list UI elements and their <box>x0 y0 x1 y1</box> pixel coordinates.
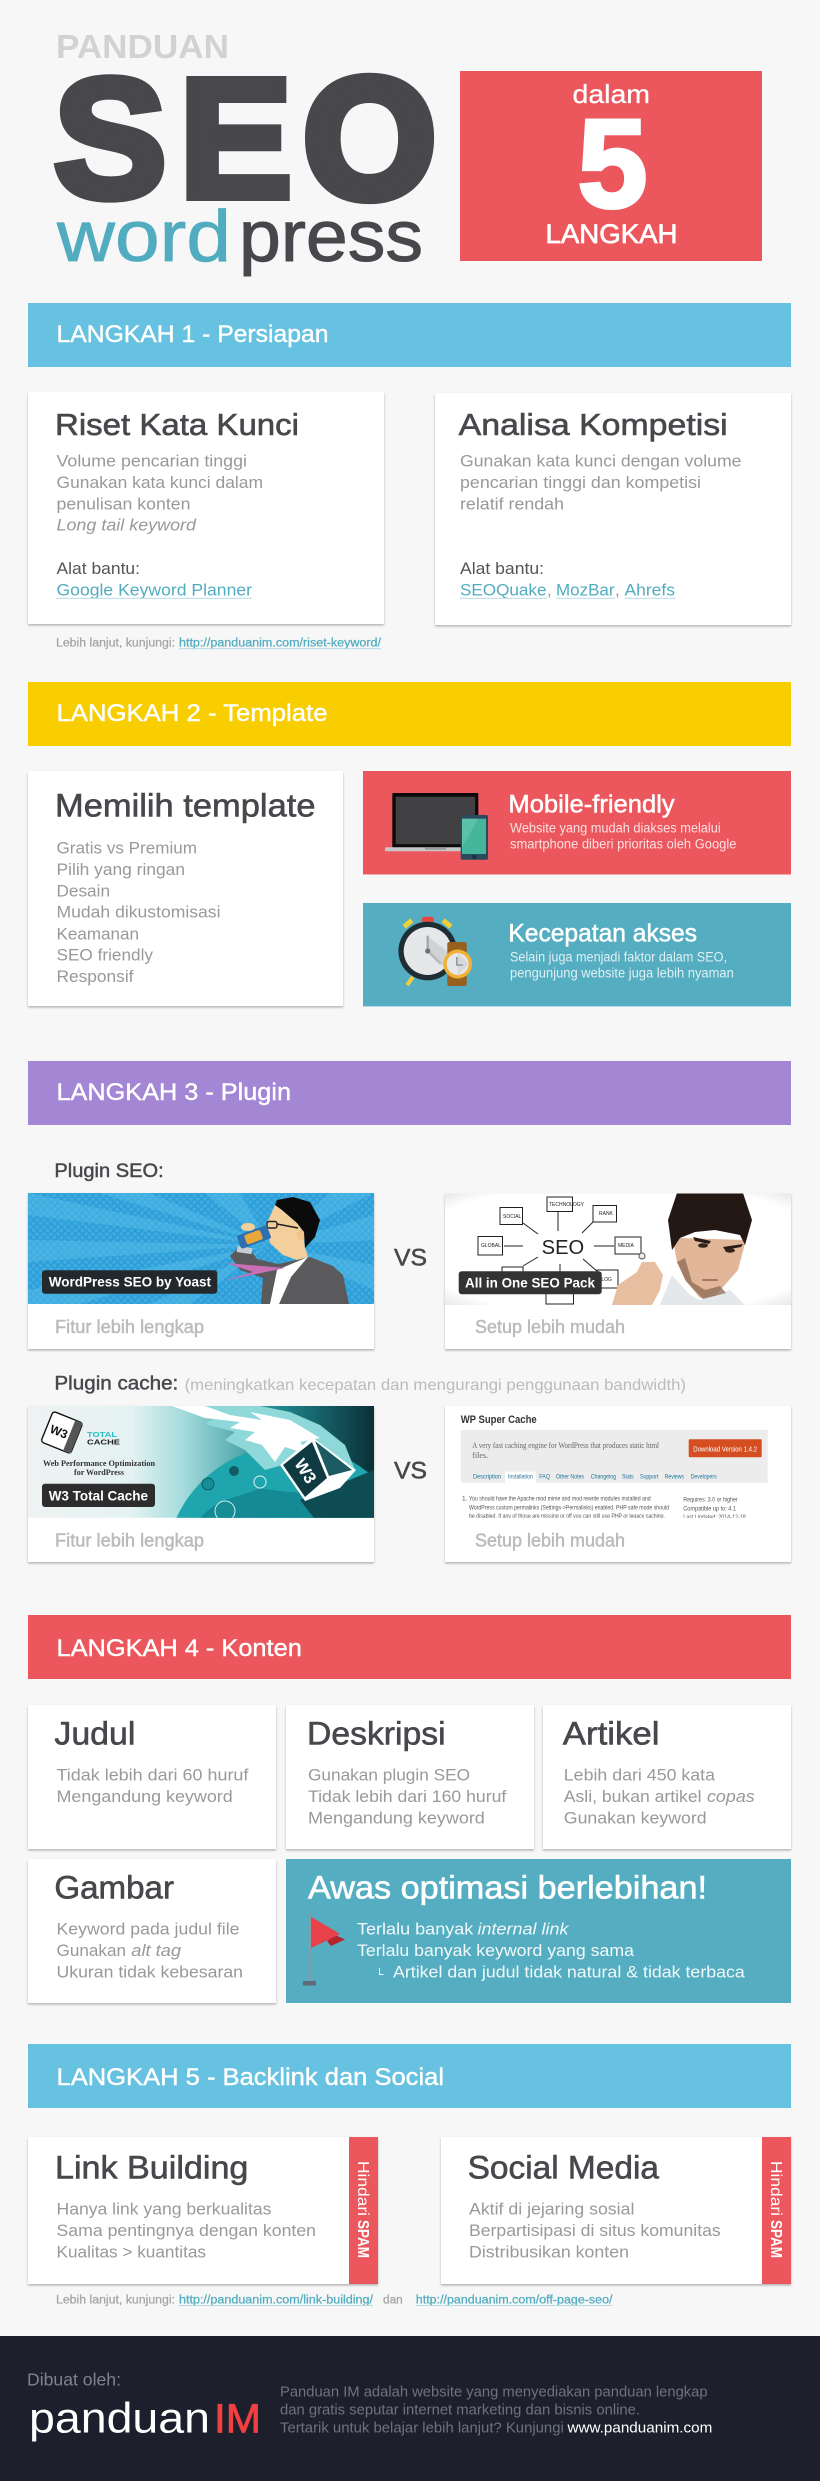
note: riset keyword link: http://panduanim.com/riset-keyword/ <box>179 638 382 650</box>
caption: Setup lebih mudah <box>475 1531 625 1551</box>
icon: red flag <box>303 1913 345 1986</box>
note: riset keyword link: Lebih lanjut, kunjungi: <box>56 638 175 650</box>
step 4 header: LANGKAH 4 - Konten <box>56 1635 302 1662</box>
panel: judul: Judul <box>54 1715 135 1751</box>
illustration: all in one seo banner: SOCIAL <box>503 1214 522 1220</box>
label: w3 total cache: W3 Total Cache <box>49 1487 148 1503</box>
note: riset keyword link <box>56 638 382 650</box>
panel: memilih template: Responsif <box>56 967 134 986</box>
note: backlink links: dan <box>383 2294 403 2306</box>
footer description: Tertarik untuk belajar lebih lanjut? Kunjungi <box>280 2421 564 2437</box>
panel: riset kata kunci <box>28 392 384 624</box>
panel: analisa kompetisi: Alat bantu: <box>460 559 544 578</box>
screenshot: wp super cache page: You should have the Apache mod mime and mod rewrite modules installed and <box>469 1495 651 1502</box>
step 1 header <box>28 303 791 367</box>
panel: deskripsi: Mengandung keyword <box>308 1808 485 1827</box>
mobile-friendly text: Mobile-friendly <box>508 791 675 819</box>
panel: awas optimasi berlebihan <box>286 1859 791 2003</box>
panel: analisa kompetisi: MozBar <box>556 580 615 600</box>
panel: artikel: Asli, bukan artikel <box>564 1787 702 1806</box>
screenshot: wp super cache page: be disabled. If any of those are missing or off you can still use PHP or legacy caching. <box>469 1513 665 1520</box>
illustration: all in one seo banner: GLOBAL <box>481 1243 501 1249</box>
illustration: all in one seo banner <box>445 1193 791 1305</box>
panel: link building <box>28 2137 378 2284</box>
panel: riset kata kunci: Long tail keyword <box>56 516 197 535</box>
illustration: w3 total cache banner: CACHE <box>87 1440 120 1446</box>
illustration: all in one seo banner: SEO <box>542 1237 584 1259</box>
screenshot: wp super cache page: FAQ <box>539 1474 550 1481</box>
panel: kecepatan akses <box>363 903 791 1007</box>
panel: memilih template <box>28 771 343 1006</box>
screenshot: wp super cache page: Installation <box>508 1474 533 1481</box>
panel: analisa kompetisi: pencarian tinggi dan kompetisi <box>460 473 701 492</box>
screenshot: wp super cache page: files. <box>472 1451 488 1460</box>
footer <box>0 2336 820 2481</box>
panel: all in one seo card <box>445 1193 791 1349</box>
panel: artikel <box>543 1705 791 1849</box>
warning list: internal link <box>478 1919 570 1938</box>
panel: deskripsi: Gunakan plugin SEO <box>308 1765 470 1784</box>
panel: artikel: Gunakan keyword <box>564 1808 707 1827</box>
callout: dalam 5 langkah: dalam <box>572 79 650 109</box>
step 3 header <box>28 1061 791 1125</box>
panel: memilih template: SEO friendly <box>56 946 153 965</box>
panel: memilih template: Desain <box>56 881 110 900</box>
illustration: yoast banner <box>28 1193 374 1304</box>
screenshot: wp super cache page: Changelog <box>591 1474 616 1481</box>
panel: deskripsi: Deskripsi <box>307 1715 446 1751</box>
panel: link building: Sama pentingnya dengan konten <box>56 2221 316 2240</box>
footer description: dan gratis seputar internet marketing dan bisnis online. <box>280 2403 640 2419</box>
illustration: all in one seo banner: RANK <box>599 1211 614 1217</box>
panel: analisa kompetisi: , <box>615 580 620 600</box>
step 3 header: LANGKAH 3 - Plugin <box>56 1079 291 1106</box>
caption: Fitur lebih lengkap <box>55 1317 204 1337</box>
panel: analisa kompetisi: SEOQuake <box>460 580 546 600</box>
step 5 header <box>28 2044 791 2108</box>
footer description <box>280 2385 712 2437</box>
panel: analisa kompetisi <box>435 393 791 625</box>
heading: plugin cache: (meningkatkan kecepatan dan mengurangi penggunaan bandwidth) <box>185 1377 686 1394</box>
step 2 header <box>28 682 791 746</box>
heading: plugin seo: Plugin SEO: <box>54 1160 164 1182</box>
screenshot: wp super cache page: 1. <box>462 1495 468 1502</box>
panel: analisa kompetisi: , <box>547 580 552 600</box>
step 4 header <box>28 1615 791 1679</box>
vertical note: hindari spam <box>354 2161 371 2258</box>
screenshot: wp super cache page: Other Notes <box>556 1474 585 1481</box>
panel: gambar <box>28 1859 276 2003</box>
mobile-friendly text: Website yang mudah diakses melalui <box>510 821 721 836</box>
panel: memilih template: Pilih yang ringan <box>56 860 185 879</box>
panel: social media: Distribusikan konten <box>469 2242 629 2261</box>
panel: gambar: Keyword pada judul file <box>56 1919 240 1938</box>
caption: Setup lebih mudah <box>475 1317 625 1337</box>
icon: laptop and phone <box>385 793 488 860</box>
label: w3 total cache <box>42 1484 155 1507</box>
mobile-friendly text: smartphone diberi prioritas oleh Google <box>510 836 736 851</box>
illustration: all in one seo banner: MEDIA <box>618 1243 634 1249</box>
panel: artikel: copas <box>707 1787 755 1806</box>
heading: SEO: S <box>54 44 167 234</box>
callout: dalam 5 langkah: LANGKAH <box>546 219 678 249</box>
panel: link building: Link Building <box>55 2149 248 2185</box>
title block <box>54 28 436 277</box>
panel: social media <box>441 2137 791 2284</box>
vertical note: hindari spam: Hindari <box>767 2161 784 2216</box>
illustration: w3 total cache banner: W3 <box>48 1422 70 1442</box>
note: backlink links: Lebih lanjut, kunjungi: <box>56 2294 175 2306</box>
panel: gambar: Ukuran tidak kebesaran <box>56 1962 243 1981</box>
illustration: all in one seo banner: BLOG <box>598 1277 612 1283</box>
panel: social media: Berpartisipasi di situs komunitas <box>469 2221 721 2240</box>
screenshot: wp super cache page: Compatible up to: 4.1 <box>683 1506 736 1513</box>
panel: deskripsi: Tidak lebih dari 160 huruf <box>308 1787 507 1806</box>
panel: judul: Tidak lebih dari 60 huruf <box>56 1765 249 1784</box>
label: all in one seo pack <box>459 1271 602 1294</box>
heading: word: word <box>56 197 231 277</box>
heading: SEO: E <box>179 44 292 234</box>
panel: artikel: Artikel <box>563 1715 660 1751</box>
vertical note: hindari spam: SPAM <box>354 2220 371 2258</box>
panel: deskripsi <box>286 1705 534 1849</box>
step 5 header: LANGKAH 5 - Backlink dan Social <box>56 2064 444 2091</box>
panel: wp super cache card <box>445 1406 791 1562</box>
panel: memilih template: Keamanan <box>56 924 139 943</box>
warning list: Artikel dan judul tidak natural & tidak terbaca <box>393 1962 745 1981</box>
callout: dalam 5 langkah: 5 <box>578 95 647 234</box>
illustration: all in one seo banner: TECHNOLOGY <box>549 1202 585 1208</box>
heading: plugin cache: Plugin cache: <box>54 1372 178 1394</box>
screenshot: wp super cache page: WP Super Cache <box>461 1414 537 1426</box>
panel: social media: Aktif di jejaring sosial <box>469 2199 634 2218</box>
panel: gambar: Gunakan <box>56 1941 126 1960</box>
logo: panduanIM: panduan <box>29 2395 210 2443</box>
illustration: w3 total cache banner: W3 <box>291 1455 320 1487</box>
label: wordpress seo by yoast: WordPress SEO by Yoast <box>49 1274 211 1290</box>
panel: judul: Mengandung keyword <box>56 1787 233 1806</box>
screenshot: wp super cache page: Support <box>640 1474 658 1481</box>
panel: analisa kompetisi: Ahrefs <box>624 580 675 600</box>
icon: clock and watch <box>398 917 472 986</box>
step 2 header: LANGKAH 2 - Template <box>56 700 328 727</box>
screenshot: wp super cache page: WordPress custom permalinks (Settings->Permalinks) enabled. PHP safe mode should <box>469 1504 669 1511</box>
panel: analisa kompetisi: relatif rendah <box>460 494 564 513</box>
vertical note: hindari spam: Hindari <box>354 2161 371 2216</box>
screenshot: wp super cache page: Stats <box>622 1474 634 1481</box>
heading: plugin cache <box>54 1372 686 1394</box>
panel: analisa kompetisi: Gunakan kata kunci dengan volume <box>460 451 742 470</box>
panel: awas optimasi berlebihan: Awas optimasi berlebihan! <box>308 1869 707 1905</box>
warning list: Terlalu banyak keyword yang sama <box>357 1941 635 1960</box>
panel: gambar: alt tag <box>131 1941 182 1960</box>
screenshot: wp super cache page: Description <box>473 1474 501 1481</box>
screenshot: wp super cache page: Reviews <box>665 1474 685 1481</box>
warning list: Terlalu banyak <box>357 1919 474 1938</box>
panel: artikel: Lebih dari 450 kata <box>564 1765 716 1784</box>
illustration: w3 total cache banner <box>28 1406 374 1518</box>
kecepatan akses text: Selain juga menjadi faktor dalam SEO, <box>510 950 727 965</box>
warning list <box>357 1919 745 1981</box>
panel: riset kata kunci: Gunakan kata kunci dalam <box>56 473 263 492</box>
screenshot: wp super cache page: Last Updated: 2014-12-18 <box>683 1514 746 1521</box>
caption: Fitur lebih lengkap <box>55 1531 204 1551</box>
credit label: Dibuat oleh: <box>27 2370 121 2390</box>
panel: mobile-friendly <box>363 771 791 875</box>
panel: social media: Social Media <box>468 2149 660 2185</box>
mobile-friendly text <box>508 791 736 851</box>
panel: link building: Kualitas > kuantitas <box>56 2242 206 2261</box>
callout: dalam 5 langkah <box>460 71 762 261</box>
note: backlink links: http://panduanim.com/link-building/ <box>179 2294 374 2306</box>
panel: riset kata kunci: penulisan konten <box>56 494 190 513</box>
heading: panduan: PANDUAN <box>56 28 229 65</box>
panel: riset kata kunci: Riset Kata Kunci <box>55 407 299 442</box>
footer description: Panduan IM adalah website yang menyediakan panduan lengkap <box>280 2385 708 2401</box>
kecepatan akses text <box>508 920 734 980</box>
screenshot: wp super cache page: Download Version 1.4.2 <box>693 1444 757 1454</box>
panel: memilih template: Gratis vs Premium <box>56 838 197 857</box>
kecepatan akses text: pengunjung website juga lebih nyaman <box>510 965 734 980</box>
panel: analisa kompetisi: Analisa Kompetisi <box>459 407 728 442</box>
note: backlink links: http://panduanim.com/off-page-seo/ <box>416 2294 613 2306</box>
panel: yoast plugin card <box>28 1193 374 1349</box>
panel: gambar: Gambar <box>54 1869 174 1905</box>
vertical note: hindari spam: SPAM <box>767 2220 784 2258</box>
label: all in one seo pack: All in One SEO Pack <box>465 1275 595 1291</box>
label: wordpress seo by yoast <box>42 1270 217 1294</box>
panel: link building: Hanya link yang berkualitas <box>56 2199 271 2218</box>
vertical note: hindari spam <box>767 2161 784 2258</box>
panel: riset kata kunci: Alat bantu: <box>56 559 140 578</box>
logo: panduanIM: IM <box>214 2396 261 2442</box>
illustration: w3 total cache banner: Web Performance Optimization <box>43 1458 155 1468</box>
panel: riset kata kunci: Google Keyword Planner <box>56 580 252 600</box>
screenshot: wp super cache page: Developers <box>691 1474 717 1481</box>
heading: press: press <box>239 197 423 277</box>
vs label: VS <box>394 1458 427 1485</box>
panel: riset kata kunci: Volume pencarian tinggi <box>56 451 247 470</box>
heading: SEO: O <box>304 44 436 234</box>
screenshot: wp super cache page <box>461 1414 768 1521</box>
screenshot: wp super cache page: A very fast caching engine for WordPress that produces static html <box>472 1441 660 1450</box>
illustration: w3 total cache banner: for WordPress <box>74 1467 125 1477</box>
panel: judul <box>28 1705 276 1849</box>
note: backlink links <box>56 2294 613 2306</box>
step 1 header: LANGKAH 1 - Persiapan <box>56 321 328 348</box>
panel: memilih template: Mudah dikustomisasi <box>56 903 221 922</box>
panel: memilih template: Memilih template <box>55 788 316 824</box>
screenshot: wp super cache page: Requires: 3.0 or higher <box>683 1496 738 1503</box>
panel: w3 total cache card <box>26 1406 376 1565</box>
vs label: VS <box>394 1245 427 1272</box>
footer description: www.panduanim.com <box>566 2421 712 2437</box>
illustration: w3 total cache banner: TOTAL <box>87 1432 118 1439</box>
kecepatan akses text: Kecepatan akses <box>508 920 697 948</box>
